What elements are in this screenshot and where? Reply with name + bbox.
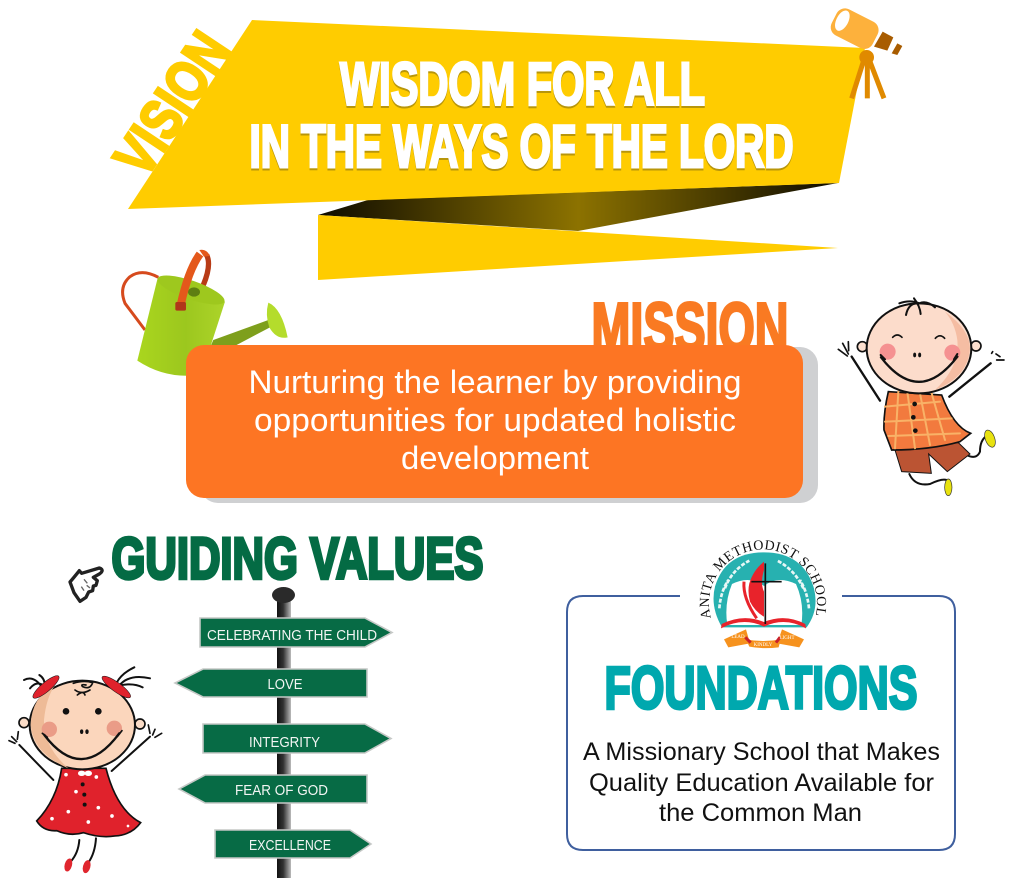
logo crest bbox=[714, 552, 816, 648]
mission statement: opportunities for updated holistic bbox=[254, 402, 736, 438]
mission statement: development bbox=[401, 440, 589, 476]
foundations frame bbox=[567, 596, 955, 850]
panel: mission bbox=[186, 345, 818, 503]
foundations statement: A Missionary School that Makes bbox=[583, 738, 940, 766]
panel body bbox=[186, 345, 803, 498]
sign: excellence: EXCELLENCE bbox=[249, 838, 331, 854]
foundations statement: Quality Education Available for bbox=[589, 769, 934, 797]
guiding values heading: GUIDING VALUES bbox=[112, 526, 484, 592]
sign: love bbox=[175, 669, 367, 697]
foundations statement: the Common Man bbox=[659, 799, 862, 827]
mission statement bbox=[248, 364, 742, 476]
foundations statement bbox=[583, 738, 940, 827]
icon: pointing hand cursor bbox=[70, 568, 102, 601]
mission statement: Nurturing the learner by providing bbox=[248, 364, 742, 400]
sign: love: LOVE bbox=[268, 677, 303, 693]
vision statement: WISDOM FOR ALL bbox=[340, 50, 705, 118]
sign: celebrating the child bbox=[200, 618, 392, 647]
sign: integrity bbox=[203, 724, 391, 753]
school logo bbox=[700, 540, 826, 648]
vision banner bbox=[128, 20, 865, 280]
sign: integrity: INTEGRITY bbox=[249, 735, 320, 751]
logo ring text: ANITA METHODIST SCHOOL bbox=[700, 540, 826, 618]
icon: jumping boy bbox=[838, 298, 1004, 496]
logo ribbon motto: KINDLY bbox=[754, 643, 773, 648]
main yellow banner bbox=[128, 20, 865, 209]
logo ribbon motto: LEAD bbox=[731, 635, 745, 640]
icon: telescope bbox=[828, 5, 902, 98]
sign: excellence bbox=[215, 830, 371, 858]
mission heading: MISSION bbox=[592, 288, 788, 366]
sign: celebrating the child: CELEBRATING THE CHILD bbox=[207, 628, 377, 644]
panel shadow bbox=[200, 347, 818, 503]
sign: fear of god bbox=[179, 775, 367, 803]
logo ribbon motto: LIGHT bbox=[780, 636, 794, 641]
post cap bbox=[272, 587, 295, 603]
vision statement bbox=[250, 50, 794, 182]
vision statement: WISDOM FOR ALL bbox=[340, 52, 705, 120]
ribbon fold shadow bbox=[318, 183, 838, 231]
icon: jumping girl bbox=[9, 667, 162, 874]
post bbox=[277, 597, 291, 878]
panel: foundations bbox=[567, 596, 955, 850]
icon: watering can bbox=[123, 250, 288, 376]
logo ribbon motto bbox=[731, 635, 794, 648]
signpost bbox=[175, 587, 392, 878]
sign: fear of god: FEAR OF GOD bbox=[235, 783, 328, 799]
lower ribbon tail bbox=[318, 215, 838, 280]
